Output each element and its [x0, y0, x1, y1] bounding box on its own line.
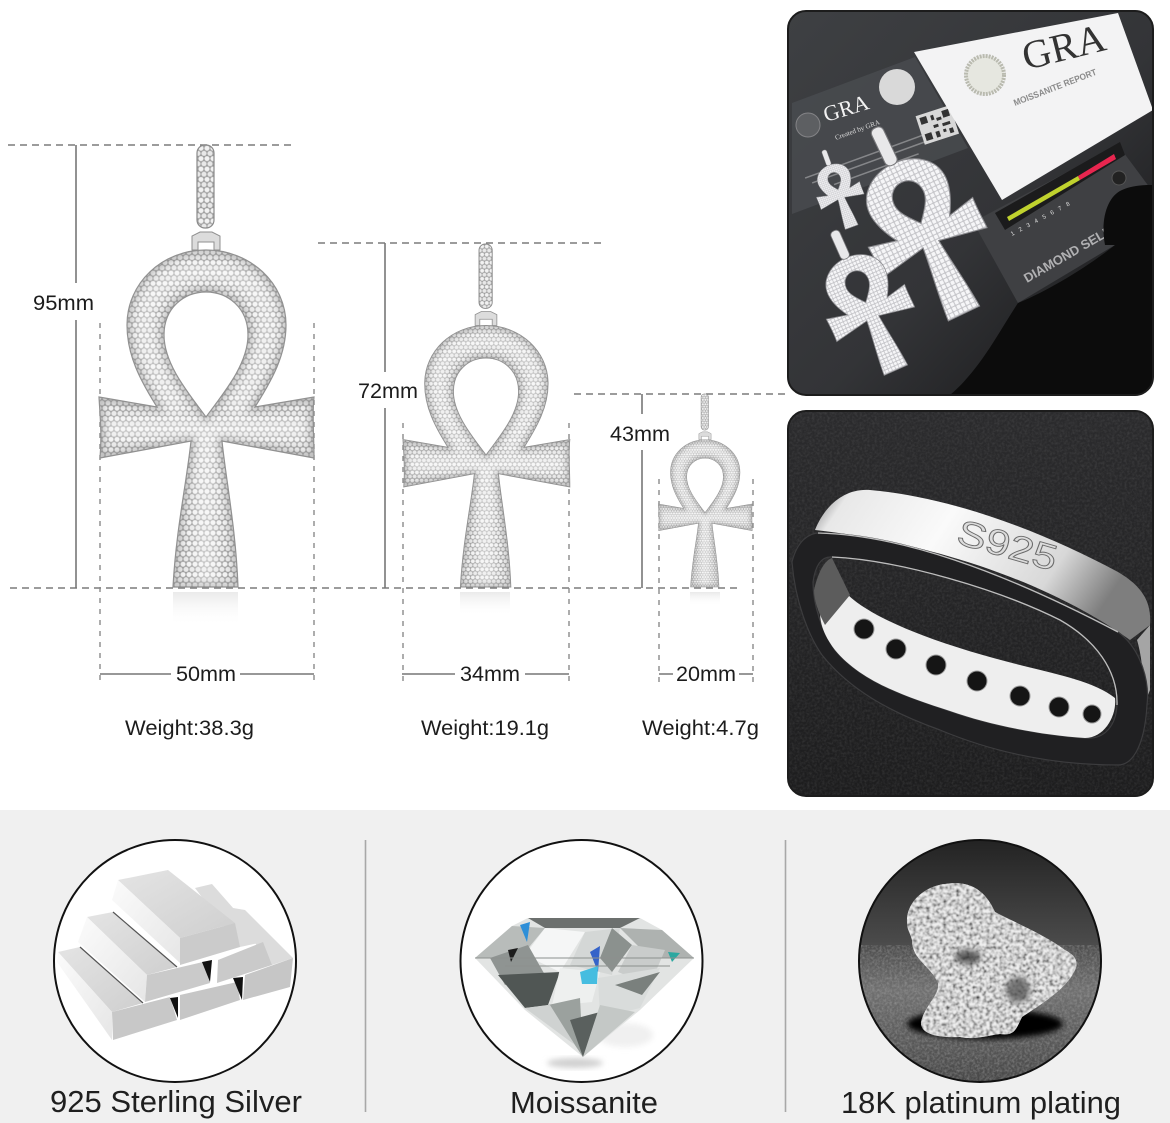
diamond selector tester: 12345678: [1010, 199, 1076, 238]
white GRA moissanite report: GRA: [1017, 15, 1110, 79]
black gloved hand: [950, 185, 1153, 395]
weight label medium: Weight:19.1g: [421, 717, 549, 740]
icon: diamond: [460, 840, 702, 1082]
label: Moissanite: Moissanite: [510, 1085, 658, 1120]
S925 engraving: S925: [953, 511, 1062, 579]
panel: GRA certificate photo: [788, 11, 1153, 395]
weight label large: Weight:38.3g: [125, 717, 254, 740]
height label 72mm: 72mm: [358, 380, 418, 403]
rim highlight lines: [818, 533, 1118, 705]
dark transparent GRA card: Created by GRA: [834, 118, 881, 142]
QR code: [916, 105, 959, 145]
diamond selector tester: DIAMOND SELECTOR: [1021, 204, 1147, 286]
large ankh pendant: [99, 145, 314, 587]
label: 18K platinum plating: 18K platinum plating: [841, 1085, 1121, 1120]
material: 925 sterling silver: [50, 840, 302, 1119]
small ankh pendant: [658, 394, 752, 587]
diamond selector tester: [973, 142, 1153, 303]
label: 925 Sterling Silver: 925 Sterling Silver: [50, 1084, 302, 1119]
small ankh pendant on card: [816, 150, 864, 230]
medium ankh pendant: [403, 244, 570, 587]
width label 20mm: 20mm: [676, 663, 736, 686]
dimension guides: [8, 145, 790, 686]
icon: platinum nugget: [859, 840, 1101, 1082]
weight label small: Weight:4.7g: [642, 717, 759, 740]
ornament on the ring side: [1137, 625, 1150, 695]
height label 43mm: 43mm: [610, 423, 670, 446]
material: moissanite: [460, 840, 702, 1120]
size comparison: pendants and dimensions: [8, 145, 790, 740]
panel: materials strip: [0, 810, 1170, 1123]
dark transparent GRA card: GRA: [820, 89, 872, 127]
medium ankh pendant on card: [826, 230, 916, 376]
white GRA moissanite report: [914, 13, 1153, 200]
width label 50mm: 50mm: [176, 663, 236, 686]
width label 34mm: 34mm: [460, 663, 520, 686]
height label 95mm: 95mm: [33, 292, 94, 315]
ring front rim: [792, 533, 1148, 765]
icon: silver bars: [54, 840, 296, 1082]
dark transparent GRA card: [792, 57, 968, 214]
ring inner floor with stone settings: [814, 558, 1115, 738]
white GRA moissanite report: MOISSANITE REPORT: [1012, 67, 1098, 108]
pendant reflections: [173, 592, 720, 626]
large ankh pendant on card: [866, 126, 988, 322]
material: 18K platinum plating: [841, 840, 1121, 1120]
panel: S925 ring photo: [788, 411, 1153, 796]
ring outer band: [815, 490, 1150, 640]
